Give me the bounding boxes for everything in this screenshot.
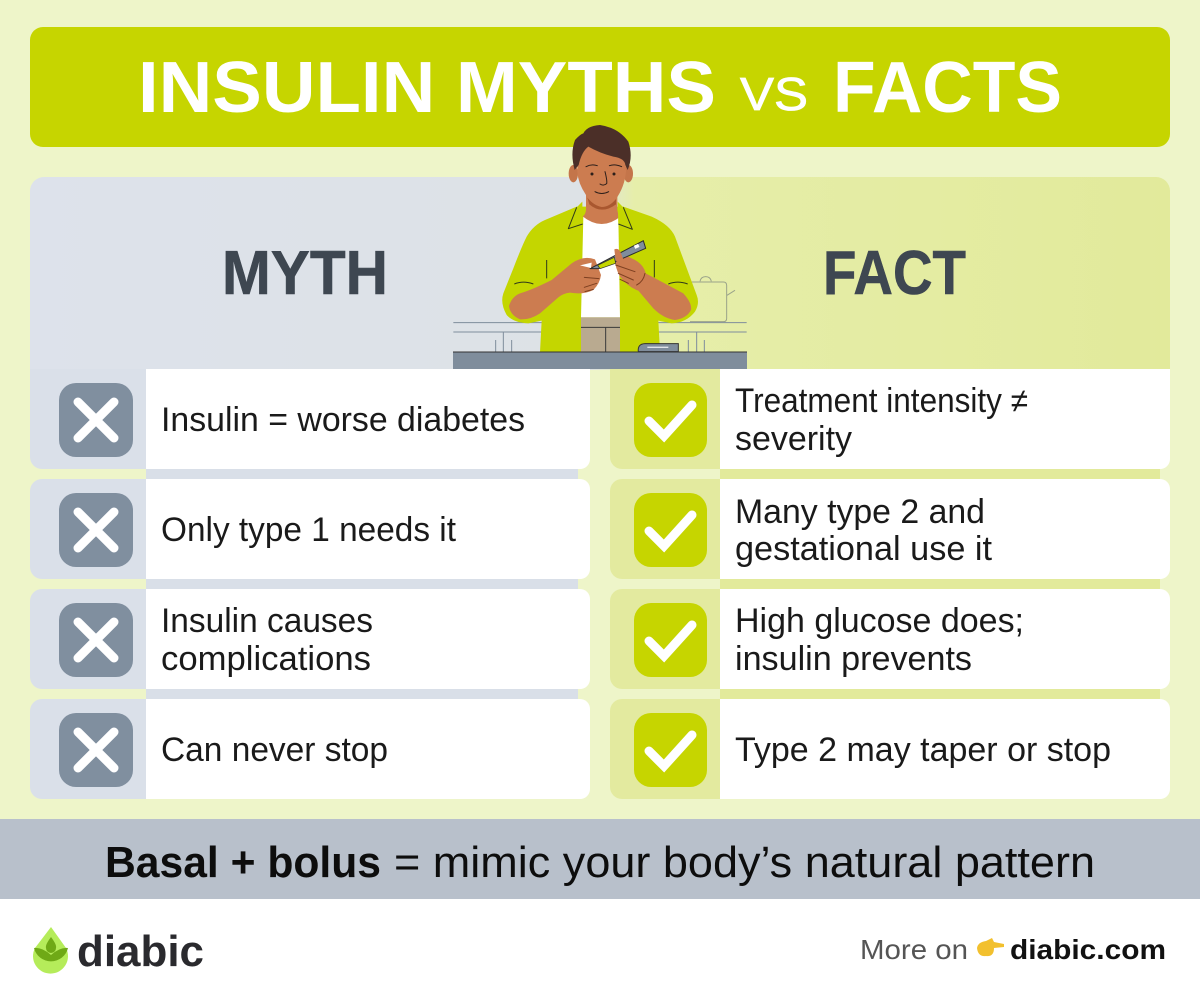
title banner xyxy=(30,27,1170,147)
thumb over pen xyxy=(614,249,623,262)
counter xyxy=(453,352,747,369)
eyes, brows, nose, mouth xyxy=(586,165,622,193)
myth row 1: Insulin = worse diabetes xyxy=(161,401,525,439)
kitchen lines and pot xyxy=(453,277,747,352)
insulin pen xyxy=(580,241,646,269)
title banner: FACTS xyxy=(833,48,1062,128)
title banner: INSULIN MYTHS xyxy=(138,48,716,128)
heading: fact: FACT xyxy=(823,239,966,308)
shirt folds xyxy=(514,260,688,284)
myth row 1 xyxy=(30,369,590,479)
logo wordmark: diabic xyxy=(77,927,204,976)
illustration: man holding insulin pen in kitchen xyxy=(453,125,747,369)
torso xyxy=(502,207,698,352)
fact row 3: insulin prevents xyxy=(735,640,972,678)
fact row 1 xyxy=(610,369,1170,479)
t-shirt xyxy=(581,217,620,317)
head xyxy=(569,125,633,224)
summary bar xyxy=(0,819,1200,899)
fact row 1: Treatment intensity ≠ xyxy=(735,382,1028,420)
hair xyxy=(572,125,631,170)
panel: header background xyxy=(30,177,1170,370)
ears xyxy=(569,165,578,182)
logo icon: drop xyxy=(33,927,68,974)
title banner: VS xyxy=(740,68,808,120)
icon: pointing hand xyxy=(977,938,1004,956)
myth row 3: complications xyxy=(161,640,371,678)
myth row 3 xyxy=(30,589,590,699)
collar xyxy=(568,202,632,229)
fact row 4: Type 2 may taper or stop xyxy=(735,731,1111,769)
myth row 4 xyxy=(30,699,590,799)
fact row 3 xyxy=(610,589,1170,699)
neck xyxy=(583,193,621,224)
trousers xyxy=(581,317,620,352)
summary bar: = mimic your body’s natural pattern xyxy=(394,838,1095,887)
fact row 2: gestational use it xyxy=(735,530,993,568)
shirt xyxy=(502,207,698,352)
right forearm and hand xyxy=(615,255,691,320)
fact row 1: severity xyxy=(735,420,852,458)
heading: myth: MYTH xyxy=(222,239,388,308)
footer xyxy=(0,899,1200,1000)
panel: myth rows xyxy=(30,369,590,799)
myth row 2 xyxy=(30,479,590,589)
fact row 4 xyxy=(610,699,1170,799)
left forearm and hand xyxy=(509,258,601,319)
myth row 4: Can never stop xyxy=(161,731,388,769)
pen on counter xyxy=(638,344,678,352)
finger lines xyxy=(584,265,645,292)
fact row 2 xyxy=(610,479,1170,589)
neck shadow xyxy=(587,198,616,210)
fact row 2: Many type 2 and xyxy=(735,493,985,531)
myth row 3: Insulin causes xyxy=(161,602,373,640)
arms, collar and pen xyxy=(509,202,691,320)
fact row 3: High glucose does; xyxy=(735,602,1024,640)
summary bar: Basal + bolus xyxy=(105,838,381,887)
face xyxy=(577,142,626,207)
website: diabic.com xyxy=(1010,934,1166,965)
more on text: More on xyxy=(860,934,968,965)
myth row 2: Only type 1 needs it xyxy=(161,511,457,549)
panel: fact rows xyxy=(610,369,1170,799)
